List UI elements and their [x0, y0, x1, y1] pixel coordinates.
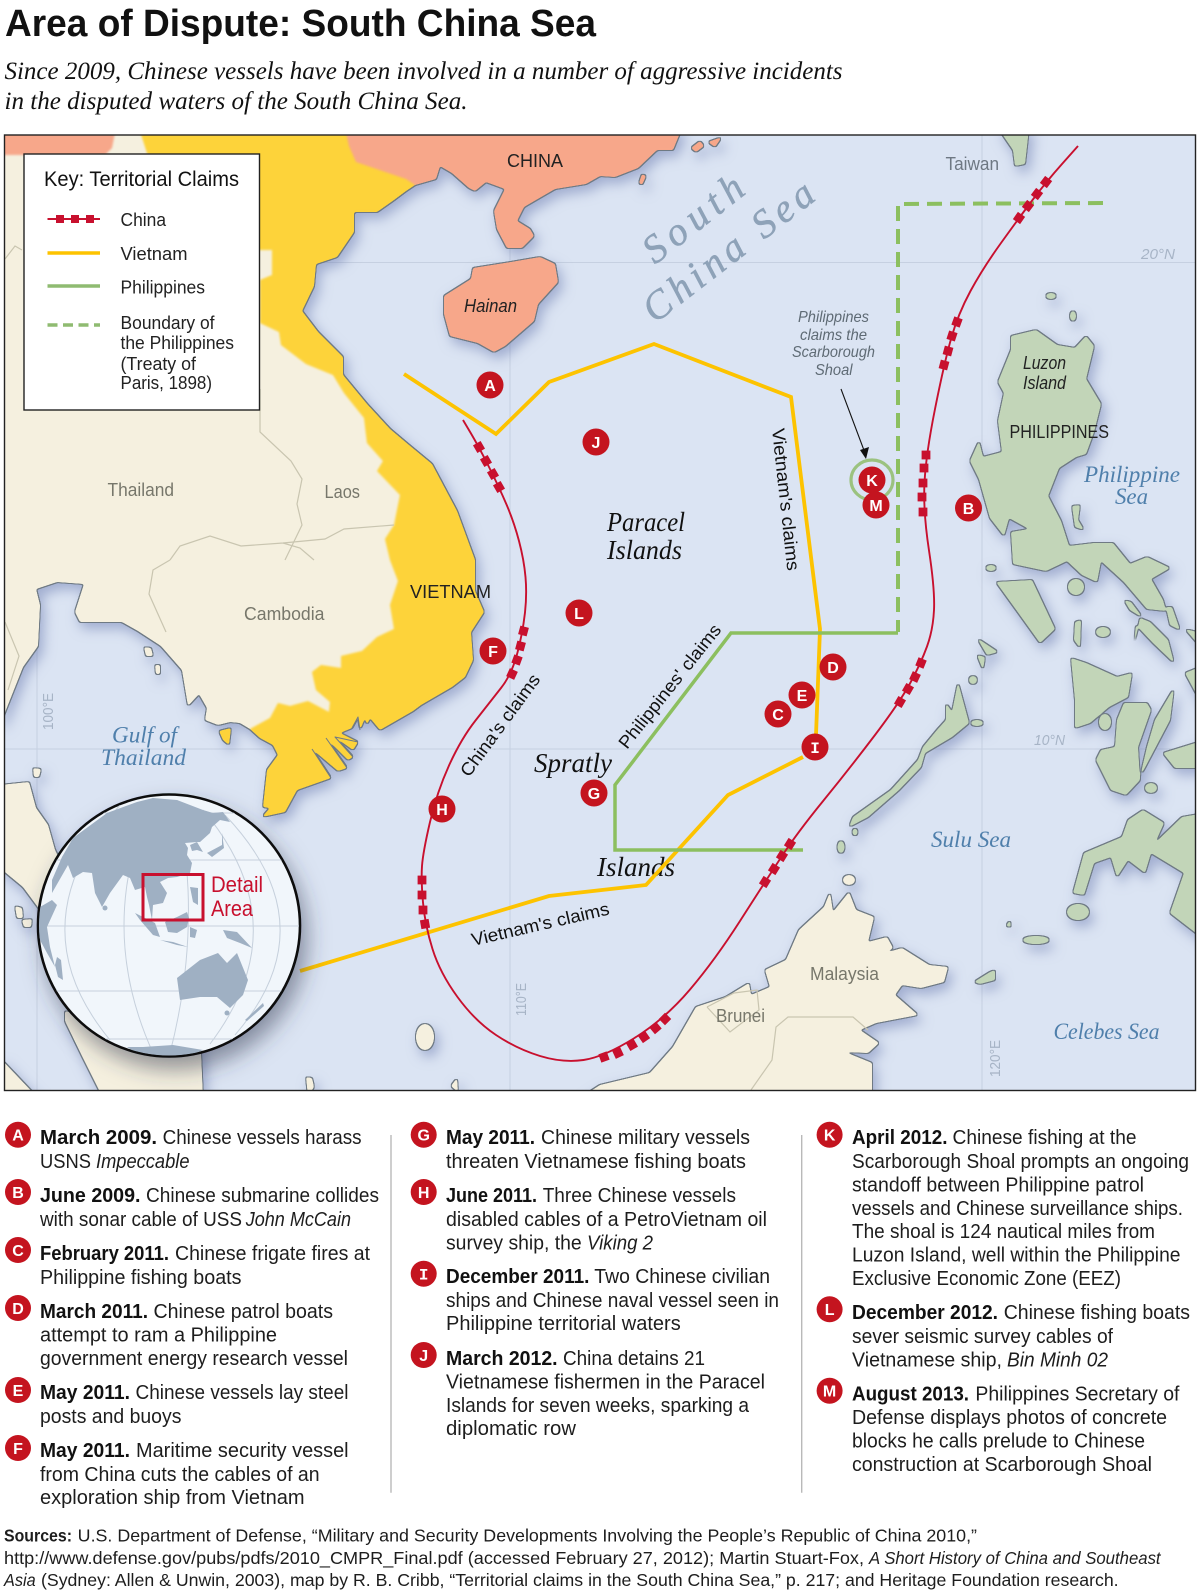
incident L: sever seismic survey cables of — [852, 1326, 1113, 1348]
map marker C — [764, 700, 792, 728]
incident J: China detains 21 — [563, 1348, 705, 1370]
incident H: disabled cables of a PetroVietnam oil — [446, 1209, 767, 1231]
place labels: island groups: Islands — [606, 535, 682, 565]
incident B: B — [12, 1185, 24, 1202]
graticule labels: 120°E — [987, 1040, 1004, 1077]
incident G: threaten Vietnamese fishing boats — [446, 1151, 746, 1173]
place labels: countries: Taiwan — [946, 154, 999, 174]
incident K: Chinese fishing at the — [952, 1127, 1136, 1149]
place labels: seas: Sea — [1115, 484, 1148, 509]
graticule labels — [40, 246, 1175, 1077]
incident L: Chinese fishing boats — [1004, 1302, 1190, 1324]
land: Hainan — [444, 257, 558, 352]
incident D: March 2011. — [40, 1301, 148, 1323]
panel: key, territorial claims — [24, 154, 260, 410]
claim line labels: China's claims — [456, 670, 544, 780]
place labels: countries: Malaysia — [810, 964, 880, 984]
place labels: countries: Thailand — [108, 480, 174, 500]
incident H: survey ship, the — [446, 1232, 582, 1254]
place labels: countries: Laos — [324, 482, 360, 502]
incident B: John McCain — [245, 1209, 351, 1231]
incident A: Impeccable — [96, 1151, 190, 1173]
place labels: countries: Island — [1023, 373, 1067, 393]
land: Southeast Asian mainland — [0, 128, 400, 729]
incident E: posts and buoys — [40, 1406, 181, 1428]
place labels: seas — [101, 165, 1180, 1044]
column divider 1 — [390, 1135, 392, 1493]
incident A: A — [12, 1128, 24, 1144]
incident M: blocks he calls prelude to Chinese — [852, 1431, 1145, 1453]
incident K: April 2012. — [852, 1127, 948, 1149]
map marker C: C — [772, 707, 784, 724]
map marker B: B — [963, 501, 974, 518]
key entry: Vietnam: Vietnam — [120, 244, 188, 264]
map marker M — [862, 492, 890, 518]
map marker F: F — [488, 644, 498, 661]
sources text: Asia — [3, 1570, 36, 1590]
incident B: June 2009. — [40, 1185, 140, 1207]
key entry: China: China — [120, 210, 167, 230]
Philippines claim line — [615, 633, 898, 850]
callout: Philippines claims the Scarborough Shoal: Shoal — [815, 362, 853, 379]
claim line labels: Vietnam's claims — [768, 427, 803, 572]
place labels: island groups: Paracel — [606, 507, 685, 537]
incident E: Chinese vessels lay steel — [136, 1382, 348, 1404]
key title: Key: Territorial Claims — [44, 168, 239, 191]
incident K: K — [824, 1128, 836, 1144]
incident M: M — [823, 1384, 836, 1400]
map marker G: G — [588, 786, 600, 803]
incident D: government energy research vessel — [40, 1348, 348, 1370]
incident G: G — [417, 1128, 430, 1144]
incident I: I — [419, 1266, 429, 1284]
incident J: Islands for seven weeks, sparking a — [446, 1395, 750, 1417]
incident I: December 2011. — [446, 1266, 589, 1288]
key entry: China — [48, 210, 167, 230]
incident C: C — [12, 1243, 24, 1260]
place labels: island groups: Islands — [596, 852, 675, 882]
column divider 2 — [801, 1135, 803, 1493]
key entry: Boundary of the Philippines: the Philippines — [120, 333, 234, 353]
subtitle: in the disputed waters of the South China Sea. — [4, 88, 468, 115]
incident E: E — [13, 1383, 24, 1400]
globe shadow and disc — [38, 794, 300, 1056]
China claim line — [418, 146, 1078, 1062]
incident K — [817, 1122, 1189, 1290]
incident K: The shoal is 124 nautical miles from — [852, 1221, 1155, 1243]
incident F: F — [13, 1441, 23, 1458]
subtitle — [4, 58, 842, 115]
land: Philippine islands — [838, 293, 1200, 984]
graticule labels: 110°E — [513, 983, 530, 1016]
sources text: A Short History of China and Southeast — [868, 1548, 1162, 1568]
globe: Indonesia and Philippines — [135, 887, 252, 948]
detail area label: Area — [211, 896, 254, 921]
map marker D: D — [827, 660, 839, 677]
incident F: exploration ship from Vietnam — [40, 1487, 305, 1509]
incident H: Viking 2 — [587, 1232, 653, 1254]
sources text: http://www.defense.gov/pubs/pdfs/2010_CMPR_Final.pdf (accessed February 27, 2012); Martin Stuart-Fox, — [4, 1548, 864, 1569]
land: China — [345, 128, 682, 248]
place labels: seas: Celebes Sea — [1054, 1019, 1160, 1044]
incident M: Philippines Secretary of — [975, 1384, 1180, 1406]
place labels: countries: Brunei — [716, 1006, 765, 1026]
sources text: (Sydney: Allen & Unwin, 2003), map by R. B. Cribb, “Territorial claims in the South China Sea,” p. 217; and Heritage Foundation research. — [41, 1570, 1119, 1590]
detail area box — [143, 874, 203, 920]
map marker I — [802, 734, 828, 760]
map marker K — [858, 466, 886, 494]
claim line labels — [456, 427, 803, 950]
sea background — [5, 135, 1195, 1090]
title: Area of Dispute: South China Sea — [5, 3, 597, 45]
map marker G — [580, 780, 608, 806]
land: Vietnam — [139, 128, 484, 817]
incident G: Chinese military vessels — [541, 1127, 750, 1149]
map marker D — [820, 654, 846, 680]
map marker A: A — [484, 378, 496, 395]
China claim line: square ticks — [418, 176, 1052, 1062]
graticule labels: 100°E — [40, 693, 57, 730]
Mekong delta channels and inland borders — [5, 246, 868, 1090]
detail area label: Detail — [211, 872, 263, 897]
map marker K: K — [866, 473, 878, 490]
sources text — [3, 1526, 1162, 1590]
map marker L: L — [574, 606, 584, 623]
incident H: June 2011. — [446, 1185, 537, 1207]
place labels: seas: China Sea — [633, 170, 823, 331]
incident K: standoff between Philippine patrol — [852, 1175, 1144, 1197]
incident B: with sonar cable of USS — [39, 1209, 242, 1231]
place labels: countries: Cambodia — [244, 604, 325, 624]
incident E — [5, 1377, 348, 1428]
incident C: Philippine fishing boats — [40, 1267, 242, 1289]
incident C: Chinese frigate fires at — [175, 1243, 370, 1265]
incident L — [817, 1296, 1190, 1372]
incident C: February 2011. — [40, 1243, 169, 1265]
incident M: Defense displays photos of concrete — [852, 1407, 1167, 1429]
incident I: Two Chinese civilian — [594, 1266, 770, 1288]
map marker A — [476, 372, 504, 398]
incident J: Vietnamese fishermen in the Paracel — [446, 1372, 765, 1394]
incident H: Three Chinese vessels — [543, 1185, 736, 1207]
detail area label — [211, 872, 263, 921]
map marker E: E — [797, 688, 808, 705]
key entry: Boundary of the Philippines — [48, 313, 234, 393]
callout: Philippines claims the Scarborough Shoal: Philippines — [798, 309, 869, 326]
incident A — [5, 1122, 362, 1173]
boundary of the Philippines, dashed — [898, 203, 1103, 632]
sources text: Sources: — [4, 1526, 72, 1546]
incident M — [817, 1378, 1180, 1476]
place labels: countries: CHINA — [507, 151, 563, 171]
incident M: construction at Scarborough Shoal — [852, 1454, 1152, 1476]
panel: incident list column 1 — [5, 1122, 379, 1509]
place labels: seas: Philippine — [1083, 462, 1180, 487]
incident K: vessels and Chinese surveillance ships. — [852, 1198, 1183, 1220]
panel: incident list column 3 — [817, 1122, 1190, 1476]
place labels: countries: Hainan — [464, 296, 517, 316]
sources text: U.S. Department of Defense, “Military and Security Developments Involving the People’s Republic of China 2010,” — [78, 1526, 977, 1546]
incident F: from China cuts the cables of an — [40, 1464, 320, 1486]
Vietnam claim line — [300, 344, 820, 971]
callout: Philippines claims the Scarborough Shoal: claims the — [800, 327, 867, 344]
incident D — [5, 1295, 348, 1370]
incident G — [411, 1122, 750, 1173]
incident J — [411, 1342, 765, 1440]
incident K: Luzon Island, well within the Philippine — [852, 1245, 1180, 1267]
place labels: countries: VIETNAM — [410, 582, 491, 602]
incident L: December 2012. — [852, 1302, 998, 1324]
map marker J — [582, 428, 610, 456]
subtitle: Since 2009, Chinese vessels have been involved in a number of aggressive incidents — [4, 58, 842, 85]
incident J: diplomatic row — [446, 1418, 577, 1440]
incident A: USNS — [40, 1151, 91, 1173]
incident K: Scarborough Shoal prompts an ongoing — [852, 1151, 1189, 1173]
map marker M: M — [869, 498, 883, 515]
map marker H — [428, 796, 456, 822]
incident F — [5, 1435, 349, 1509]
key entry: Vietnam — [48, 244, 188, 264]
incident F: May 2011. — [40, 1440, 130, 1462]
map frame — [4, 135, 1196, 1090]
Scarborough Shoal ring — [851, 460, 893, 500]
incident C — [5, 1237, 370, 1289]
land: Luzon — [970, 330, 1170, 611]
map marker J: J — [592, 435, 600, 452]
graticule labels: 10°N — [1034, 732, 1065, 749]
key entry: Philippines: Philippines — [120, 278, 205, 298]
claim line labels: Vietnam's claims — [469, 899, 611, 950]
key entry: Boundary of the Philippines: Boundary of — [120, 313, 215, 333]
incident I: ships and Chinese naval vessel seen in — [446, 1290, 779, 1312]
place labels: island groups: Spratly — [534, 748, 612, 778]
inset globe — [30, 798, 310, 1060]
incident L: Vietnamese ship, — [852, 1350, 1002, 1372]
land masses — [0, 128, 1200, 1098]
incident D: Chinese patrol boats — [154, 1301, 333, 1323]
incident E: May 2011. — [40, 1382, 130, 1404]
incident H — [411, 1179, 767, 1254]
map marker I: I — [810, 740, 820, 758]
place labels: seas: South — [633, 165, 753, 272]
incident B: Chinese submarine collides — [146, 1185, 379, 1207]
map marker F — [480, 638, 506, 664]
callout: Philippines claims the Scarborough Shoal: Scarborough — [792, 344, 875, 361]
incident I — [411, 1261, 779, 1335]
place labels: seas: Thailand — [101, 745, 187, 770]
incident I: Philippine territorial waters — [446, 1313, 681, 1335]
globe grid — [30, 798, 310, 1053]
map marker L — [566, 600, 592, 626]
graticule labels: 20°N — [1140, 246, 1175, 263]
globe: Australia — [177, 953, 248, 1008]
incident H: H — [418, 1185, 429, 1202]
incident F: Maritime security vessel — [136, 1440, 349, 1462]
incident G: May 2011. — [446, 1127, 535, 1149]
globe: Asia — [52, 798, 230, 920]
map marker B — [955, 494, 982, 522]
map marker H: H — [436, 802, 448, 819]
panel: incident list column 2 — [411, 1122, 779, 1440]
place labels: seas: Gulf of — [112, 722, 181, 748]
panel: map of the South China Sea — [0, 128, 1200, 1098]
claim line labels: Philippines' claims — [614, 620, 725, 752]
callout: Philippines claims the Scarborough Shoal — [792, 309, 893, 500]
incident B — [5, 1179, 379, 1231]
land: Thai peninsula and Sumatra — [0, 782, 70, 910]
land: Taiwan — [998, 128, 1029, 166]
land: Borneo — [580, 892, 948, 1098]
map marker E — [788, 682, 816, 708]
incident J: March 2012. — [446, 1348, 558, 1370]
incident A: March 2009. — [40, 1127, 157, 1149]
place labels: seas: Sulu Sea — [931, 827, 1011, 852]
incident D: D — [12, 1301, 24, 1318]
key entry: Boundary of the Philippines: (Treaty of — [120, 354, 197, 374]
key entry: Boundary of the Philippines: Paris, 1898) — [120, 373, 212, 393]
place labels: countries — [108, 151, 1109, 1026]
incident L: Bin Minh 02 — [1007, 1350, 1108, 1372]
place labels: countries: PHILIPPINES — [1010, 422, 1109, 442]
globe: Africa and Antarctica — [37, 900, 57, 967]
place labels: countries: Luzon — [1023, 353, 1066, 373]
globe: Japan and Korea — [190, 842, 203, 852]
incident A: Chinese vessels harass — [163, 1127, 362, 1149]
graticule — [5, 135, 1195, 1090]
incident M: August 2013. — [852, 1384, 969, 1406]
incident J: J — [419, 1348, 428, 1365]
place labels: island groups — [534, 507, 685, 882]
incident D: attempt to ram a Philippine — [40, 1325, 277, 1347]
incident K: Exclusive Economic Zone (EEZ) — [852, 1268, 1121, 1290]
arrow to shoal — [841, 389, 869, 459]
incident L: L — [825, 1302, 835, 1319]
